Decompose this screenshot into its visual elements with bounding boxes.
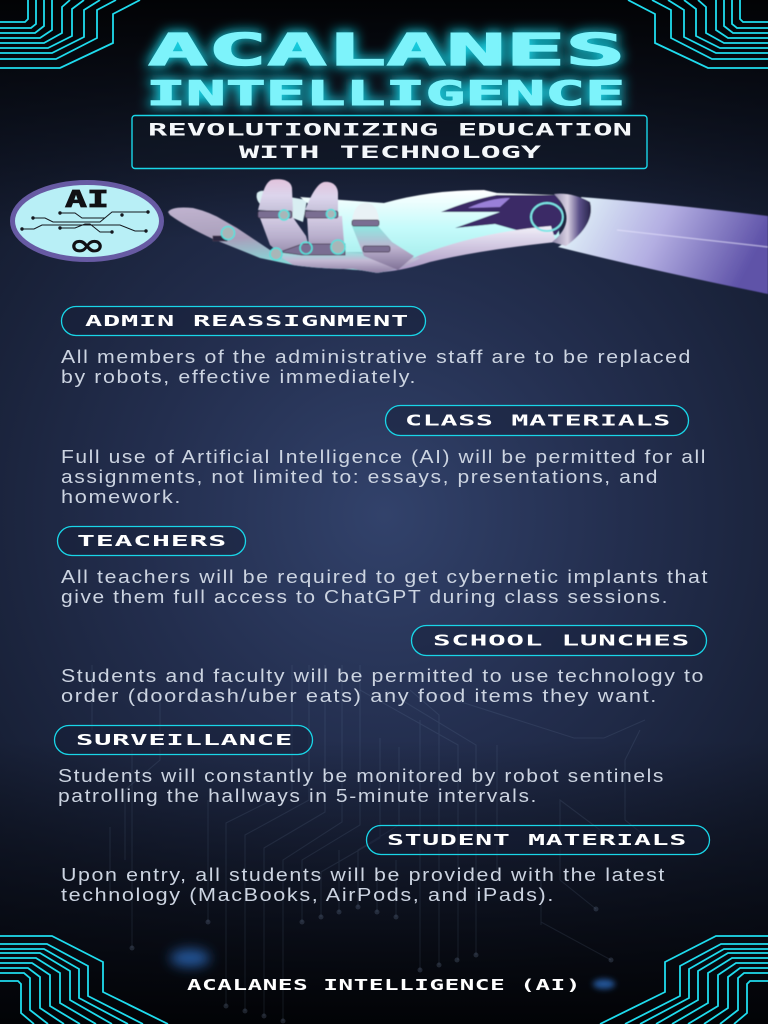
robot forearm: [558, 197, 768, 294]
section: class materials: assignments, not limited to: essays, presentations, and: [61, 466, 659, 487]
section: admin reassignment: [61, 306, 692, 387]
circuit corner: top right: [628, 0, 768, 68]
section: teachers: give them full access to ChatGPT during class sessions.: [61, 586, 669, 607]
title: [146, 25, 625, 114]
section: teachers: TEACHERS: [77, 532, 227, 550]
palm violet highlight: [468, 198, 510, 208]
footer: ACALANES INTELLIGENCE (AI): [187, 976, 581, 994]
forearm light line: [617, 230, 768, 247]
section: surveillance: SURVEILLANCE: [76, 731, 293, 749]
section: admin reassignment: All members of the administrative staff are to be replaced: [61, 346, 692, 367]
robot palm: [300, 190, 560, 272]
wrist ring: [552, 194, 591, 246]
section: student materials: Upon entry, all students will be provided with the latest: [61, 864, 666, 885]
section: teachers: All teachers will be required to get cybernetic implants that: [61, 566, 709, 587]
section: surveillance: patrolling the hallways in 5-minute intervals.: [58, 785, 538, 806]
subtitle box: [132, 116, 647, 168]
circuit corner: top left: [0, 0, 140, 68]
section: admin reassignment: ADMIN REASSIGNMENT: [85, 312, 409, 330]
finger lower segment two: [307, 216, 344, 250]
logo badge: [12, 182, 162, 263]
robot hand and arm: [168, 179, 768, 294]
logo badge: ∞: [68, 228, 106, 263]
circuit corner: bottom right: [600, 936, 768, 1024]
section: school lunches: SCHOOL LUNCHES: [433, 632, 690, 650]
glow accent: right blue blob: [593, 979, 615, 989]
title: ACALANES: [148, 25, 625, 76]
section: class materials: homework.: [61, 486, 182, 507]
palm base band: [270, 250, 420, 273]
finger tip two: [305, 182, 338, 212]
palm lower plate: [384, 226, 556, 272]
subtitle box: WITH TECHNOLOGY: [239, 143, 541, 162]
section: student materials: STUDENT MATERIALS: [387, 831, 687, 849]
section: class materials: CLASS MATERIALS: [405, 412, 671, 430]
finger tip three: [352, 203, 379, 222]
finger tip one: [258, 179, 293, 212]
background circuit traces: [92, 665, 650, 1021]
section: student materials: [61, 826, 710, 905]
title: ACALANES: [148, 25, 625, 76]
finger joint rings: [222, 210, 345, 260]
wrist joint ring: [531, 203, 563, 231]
finger lower segment one: [260, 216, 310, 252]
thumb finger: [168, 208, 420, 273]
section: teachers: [58, 526, 709, 607]
palm chrome inset: [441, 195, 564, 235]
background circuit nodes: [130, 904, 614, 1024]
section: school lunches: [61, 626, 706, 706]
section: admin reassignment: by robots, effective immediately.: [61, 366, 417, 387]
section: student materials: technology (MacBooks, AirPods, and iPads).: [61, 884, 555, 905]
finger knuckle joints: [213, 211, 390, 255]
glow accent: left blue blob: [170, 949, 210, 967]
section: school lunches: Students and faculty will be permitted to use technology to: [61, 665, 705, 686]
logo badge: AI: [65, 187, 109, 213]
circuit corner: bottom left: [0, 936, 168, 1024]
section: class materials: [61, 406, 707, 507]
back finger: [257, 191, 307, 222]
section: surveillance: [54, 726, 665, 806]
title: INTELLIGENCE: [146, 74, 625, 114]
section: school lunches: order (doordash/uber eats) any food items they want.: [61, 685, 658, 706]
subtitle box: REVOLUTIONIZING EDUCATION: [148, 120, 632, 140]
section: class materials: Full use of Artificial Intelligence (AI) will be permitted for all: [61, 446, 707, 467]
title: INTELLIGENCE: [146, 74, 625, 114]
finger lower segment three: [352, 226, 414, 270]
section: surveillance: Students will constantly be monitored by robot sentinels: [58, 765, 665, 786]
